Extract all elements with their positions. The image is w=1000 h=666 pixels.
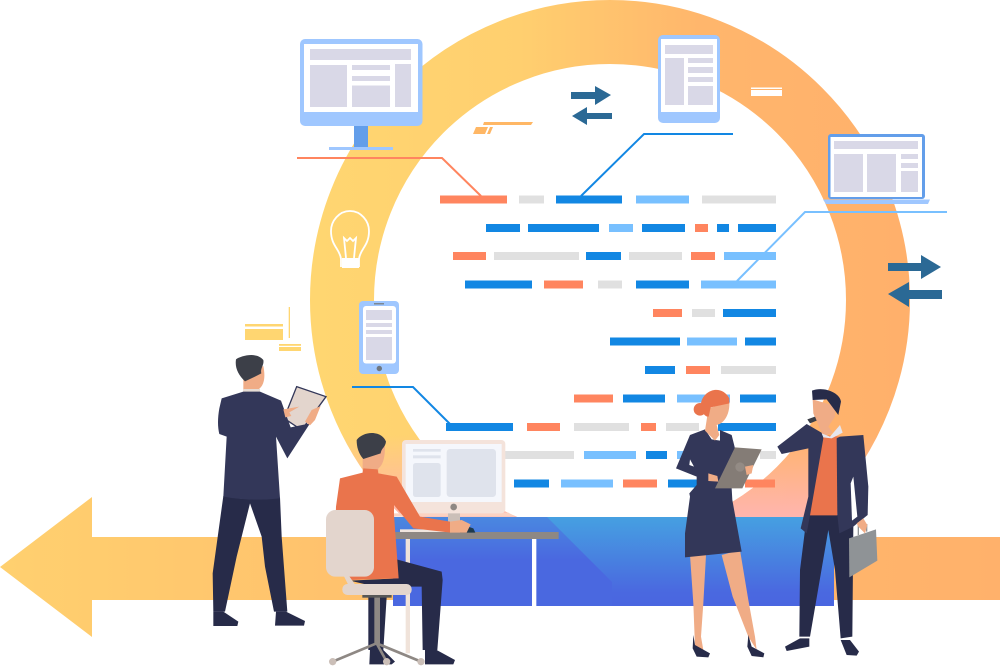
icon: light bulb bbox=[331, 211, 369, 268]
workstation: desk and computer bbox=[393, 440, 559, 653]
circular ring bbox=[342, 32, 878, 568]
code bars bbox=[440, 196, 776, 488]
large swap arrows bbox=[888, 255, 942, 307]
big left-pointing arrow bbox=[0, 497, 1000, 637]
icon: smartphone bbox=[359, 301, 399, 374]
orange dash decoration bbox=[473, 122, 533, 134]
icon: laptop bbox=[823, 134, 930, 204]
person: seated man on chair bbox=[326, 433, 471, 665]
person: man with clipboard bbox=[213, 355, 326, 626]
person: woman with tablet bbox=[676, 390, 764, 657]
white dash decoration bbox=[751, 88, 782, 96]
small swap arrows bbox=[571, 86, 612, 125]
blue floor panel bbox=[393, 517, 834, 606]
connector lines bbox=[297, 134, 947, 424]
yellow dash decoration bbox=[245, 307, 301, 351]
icon: tablet bbox=[658, 35, 720, 123]
person: man on phone with briefcase bbox=[777, 389, 877, 656]
icon: desktop monitor bbox=[300, 39, 422, 150]
